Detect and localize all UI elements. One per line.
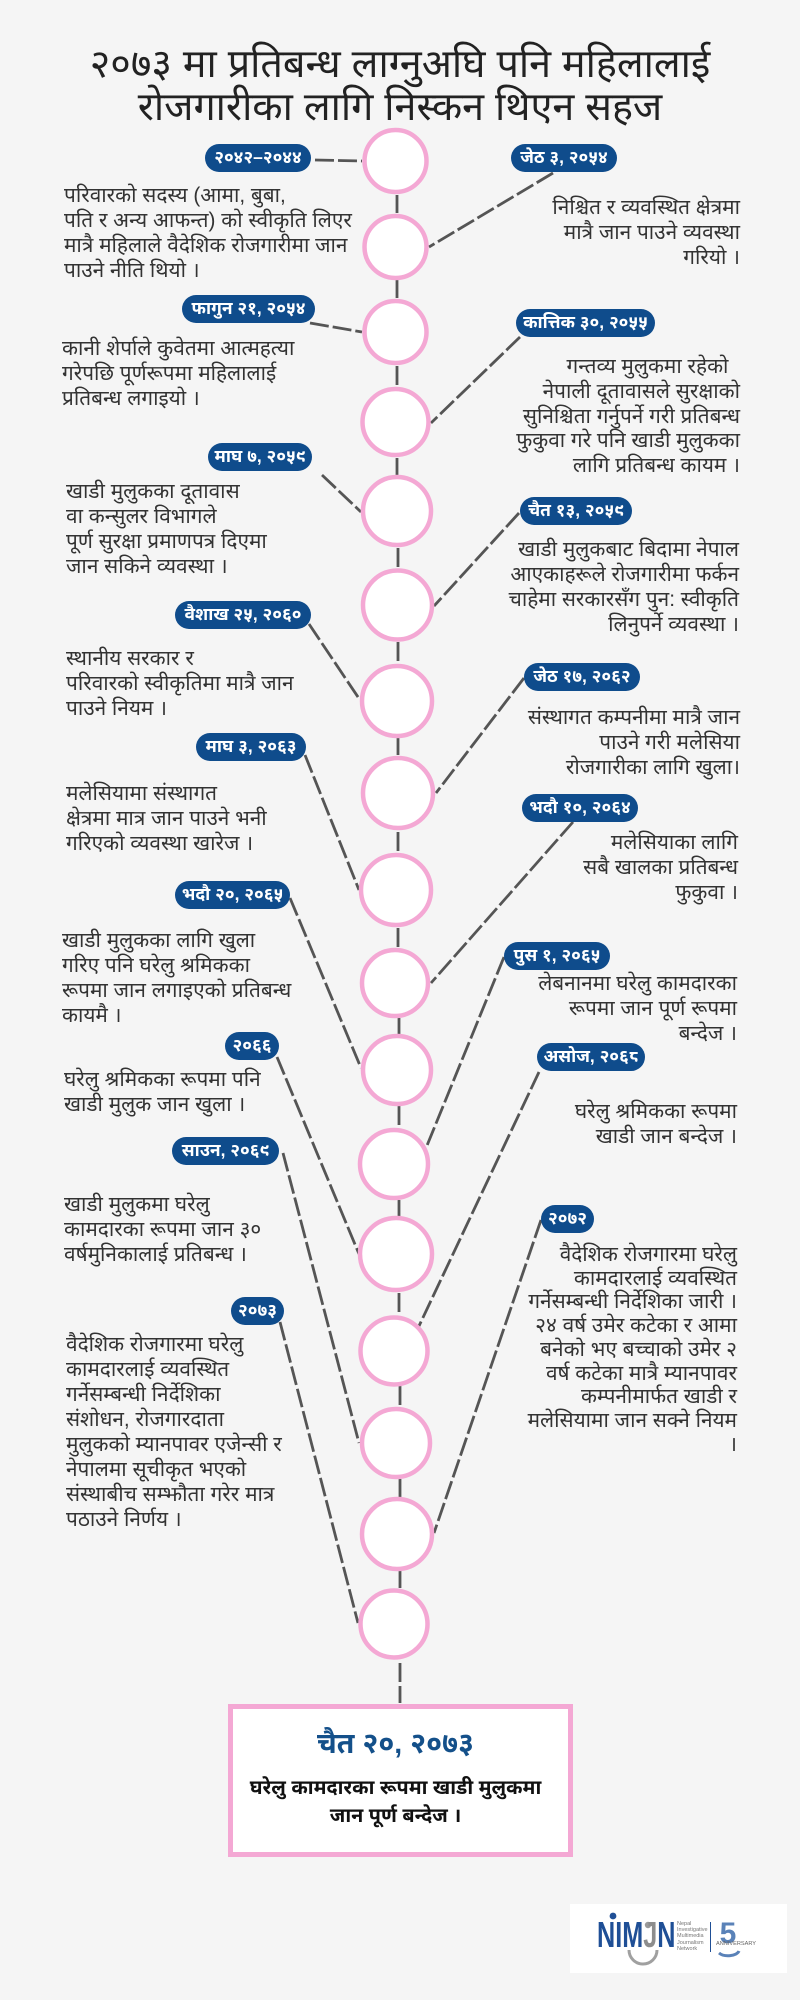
text: under 30 ban: वर्षमुनिकालाई प्रतिबन्ध ।	[64, 1243, 247, 1266]
text: Malaysia all lifted: मलेसियाका लागि	[611, 831, 738, 854]
text: Kani Sherpa: प्रतिबन्ध लगाइयो ।	[62, 387, 200, 410]
date pill: Saun 2069: साउन, २०६९	[182, 1140, 269, 1160]
logo tagline: Network	[677, 1946, 697, 1952]
text: 2072 directive: बनेको भए बच्चाको उमेर २	[540, 1338, 737, 1361]
text: family consent: परिवारको सदस्य (आमा, बुबा,	[64, 184, 286, 207]
text: Kani Sherpa	[62, 336, 295, 410]
text: returnees: चाहेमा सरकारसँग पुन: स्वीकृति	[509, 588, 739, 611]
text: Kani Sherpa: गरेपछि पूर्णरूपमा महिलालाई	[62, 362, 276, 385]
text: Lebanon ban	[538, 972, 738, 1045]
logo tagline	[677, 1921, 708, 1952]
date pill: Baishakh 25 2060	[175, 601, 311, 629]
date pill: 2066: २०६६	[233, 1035, 271, 1055]
text: 2072 directive: गर्नेसम्बन्धी निर्देशिका जारी ।	[528, 1290, 737, 1313]
text: Malaysia scrapped: मलेसियामा संस्थागत	[66, 782, 217, 805]
date pill: Bhadau 20 2065: भदौ २०, २०६५	[182, 884, 283, 904]
date pill: Chait 13 2059: चैत १३, २०५९	[528, 500, 624, 520]
text: Gulf ban domestic	[574, 1100, 738, 1148]
logo: NIMJN	[570, 1904, 787, 1973]
text: organized sector: निश्चित र व्यवस्थित क्षेत्रमा	[552, 196, 740, 219]
date pill: Bhadau 10 2064	[522, 794, 638, 822]
date pill: Jeth 17 2062: जेठ १७, २०६२	[533, 666, 631, 686]
title: २०७३ मा प्रतिबन्ध लाग्नुअघि पनि महिलालाई	[90, 42, 710, 86]
text: embassy certificate: पूर्ण सुरक्षा प्रमाणपत्र दिएमा	[66, 530, 267, 553]
text: Gulf open but domestic ban: रूपमा जान लगाइएको प्रतिबन्ध	[62, 979, 291, 1002]
date pill: Magh 7 2059: माघ ७, २०५९	[215, 446, 305, 466]
logo tagline: Investigative	[677, 1927, 708, 1933]
date pill: 2072	[541, 1205, 594, 1233]
title	[90, 42, 711, 129]
text: 2073 directive amendment: वैदेशिक रोजगारमा घरेलु	[66, 1333, 243, 1356]
text: embassy certificate: वा कन्सुलर विभागले	[66, 505, 217, 528]
logo tagline: Nepal	[677, 1921, 691, 1927]
text: embassy security: नेपाली दूतावासले सुरक्षाको	[543, 380, 740, 403]
final callout box	[228, 1704, 573, 1857]
text: 2073 directive amendment: संस्थाबीच सम्झौता गरेर मात्र	[66, 1483, 274, 1506]
text: organized sector: गरियो ।	[683, 246, 740, 269]
date pill: Bhadau 10 2064: भदौ १०, २०६४	[529, 797, 631, 817]
text: 2073 directive amendment: नेपालमा सूचीकृत भएको	[66, 1458, 246, 1481]
text: local government	[66, 646, 294, 720]
text: 2073 directive amendment: संशोधन, रोजगारदाता	[66, 1408, 224, 1431]
text: domestic workers Gulf open: घरेलु श्रमिकका रूपमा पनि	[64, 1068, 261, 1091]
callout text: घरेलु कामदारका रूपमा खाडी मुलुकमा	[250, 1777, 541, 1799]
text: embassy certificate	[66, 480, 268, 578]
text: embassy security	[516, 354, 740, 477]
text: 2072 directive: कामदारलाई व्यवस्थित	[574, 1267, 737, 1290]
text: under 30 ban	[64, 1192, 261, 1266]
text: Gulf open but domestic ban: खाडी मुलुकका लागि खुला	[62, 929, 255, 952]
text: embassy security: सुनिश्चिता गर्नुपर्ने गरी प्रतिबन्ध	[523, 405, 740, 428]
timeline circles	[360, 130, 433, 1658]
text: 2073 directive amendment	[66, 1332, 282, 1531]
date pill: Bhadau 20 2065	[175, 881, 290, 909]
text: Malaysia scrapped: क्षेत्रमा मात्र जान पाउने भनी	[66, 807, 267, 830]
date pill: Fagun 21 2054	[182, 295, 315, 323]
date pill: Kartik 30 2055: कात्तिक ३०, २०५५	[523, 312, 648, 332]
text: 2072 directive: ।	[729, 1433, 737, 1456]
text: family consent: पति र अन्य आफन्त) को स्वीकृति लिएर	[64, 209, 352, 232]
text: 2072 directive	[528, 1242, 738, 1456]
title: रोजगारीका लागि निस्कन थिएन सहज	[138, 85, 662, 129]
text: embassy certificate: खाडी मुलुकका दूतावास	[66, 480, 240, 503]
text: Gulf ban domestic: खाडी जान बन्देज ।	[596, 1125, 737, 1148]
text: local government: स्थानीय सरकार र	[66, 647, 194, 670]
date pill: Magh 3 2063: माघ ३, २०६३	[206, 736, 296, 756]
logo tagline: Journalism	[677, 1940, 704, 1946]
text: Kani Sherpa: कानी शेर्पाले कुवेतमा आत्महत्या	[62, 337, 294, 360]
text: domestic workers Gulf open: खाडी मुलुक जान खुला ।	[64, 1093, 245, 1116]
text: Lebanon ban: रूपमा जान पूर्ण रूपमा	[569, 997, 737, 1020]
text: Malaysia opened: संस्थागत कम्पनीमा मात्रै जान	[528, 706, 740, 729]
date pill: Kartik 30 2055	[516, 309, 655, 337]
text: Malaysia opened	[528, 705, 740, 780]
logo anniversary 5: 5	[720, 1917, 736, 1950]
date pill: 2073	[231, 1297, 284, 1325]
date pill: Push 1 2065	[504, 942, 610, 970]
text: Gulf open but domestic ban	[62, 928, 292, 1027]
text: 2073 directive amendment: मुलुकको म्यानपावर एजेन्सी र	[66, 1433, 282, 1456]
date pill: Magh 7 2059	[208, 443, 312, 471]
logo tagline: Multimedia	[677, 1933, 704, 1939]
text: Lebanon ban: लेबनानमा घरेलु कामदारका	[538, 972, 737, 995]
text: embassy security: लागि प्रतिबन्ध कायम ।	[573, 454, 740, 477]
date pill: Baishakh 25 2060: वैशाख २५, २०६०	[184, 604, 301, 624]
text: Gulf open but domestic ban: कायमै ।	[62, 1004, 122, 1027]
text: 2072 directive: मलेसियामा जान सक्ने नियम	[528, 1409, 737, 1432]
date pill: 2072: २०७२	[548, 1208, 587, 1228]
date pill: Push 1 2065: पुस १, २०६५	[514, 945, 600, 965]
date pill: 2042-2044	[205, 144, 311, 172]
text: embassy certificate: जान सकिने व्यवस्था ।	[66, 555, 228, 578]
text: Malaysia all lifted: सबै खालका प्रतिबन्ध	[583, 856, 738, 879]
text: embassy security: गन्तव्य मुलुकमा रहेको	[566, 355, 728, 378]
text: 2072 directive: वर्ष कटेका मात्रै म्यानपावर	[546, 1362, 737, 1385]
text: Malaysia opened: रोजगारीका लागि खुला।	[566, 756, 740, 779]
text: 2072 directive: कम्पनीमार्फत खाडी र	[581, 1385, 737, 1408]
text: organized sector	[552, 196, 740, 269]
text: local government: पाउने नियम ।	[66, 697, 167, 720]
text: returnees: खाडी मुलुकबाट बिदामा नेपाल	[518, 538, 739, 561]
text: 2073 directive amendment: कामदारलाई व्यवस्थित	[66, 1358, 229, 1381]
date pill: Fagun 21 2054: फागुन २१, २०५४	[192, 298, 305, 318]
text: organized sector: मात्रै जान पाउने व्यवस्था	[564, 221, 740, 244]
text: returnees: लिनुपर्ने व्यवस्था ।	[608, 613, 739, 636]
text: local government: परिवारको स्वीकृतिमा मात्रै जान	[66, 672, 294, 695]
text: Malaysia opened: पाउने गरी मलेसिया	[599, 731, 740, 754]
date pill: Chait 13 2059	[520, 497, 632, 525]
date pill: Asoj 2068	[537, 1043, 645, 1071]
text: 2073 directive amendment: गर्नेसम्बन्धी निर्देशिका	[66, 1383, 221, 1406]
date pill: 2042-2044: २०४२–२०४४	[214, 147, 302, 167]
date pill: 2066	[225, 1032, 279, 1060]
date pill: Saun 2069	[172, 1137, 279, 1165]
text: 2072 directive: वैदेशिक रोजगारमा घरेलु	[560, 1243, 737, 1266]
callout text	[250, 1776, 542, 1828]
callout date: चैत २०, २०७३	[317, 1728, 474, 1760]
text: returnees: आएकाहरूले रोजगारीमा फर्कन	[510, 563, 739, 586]
text: 2073 directive amendment: पठाउने निर्णय ।	[66, 1508, 182, 1531]
text: family consent: पाउने नीति थियो ।	[64, 259, 200, 282]
text: Gulf open but domestic ban: गरिए पनि घरेलु श्रमिकका	[62, 954, 250, 977]
text: domestic workers Gulf open	[64, 1068, 261, 1116]
text: Malaysia all lifted	[583, 830, 738, 904]
logo graphics	[610, 1912, 740, 1966]
text: family consent: मात्रै महिलाले वैदेशिक रोजगारीमा जान	[64, 234, 347, 257]
logo anniversary label: ANNIVERSARY	[716, 1941, 756, 1947]
text: Malaysia all lifted: फुकुवा ।	[675, 881, 738, 904]
text: returnees	[508, 538, 740, 636]
text: embassy security: फुकुवा गरे पनि खाडी मुलुकका	[516, 429, 740, 452]
date pill: Jeth 3 2054: जेठ ३, २०५४	[520, 147, 608, 167]
callout text: जान पूर्ण बन्देज ।	[330, 1804, 461, 1826]
text: Gulf ban domestic: घरेलु श्रमिकका रूपमा	[575, 1100, 737, 1123]
text: family consent	[64, 184, 352, 282]
connector lines	[277, 160, 573, 1703]
logo wordmark: NIMJN	[597, 1914, 675, 1955]
text: Lebanon ban: बन्देज ।	[679, 1022, 737, 1045]
date pill: Magh 3 2063	[196, 733, 306, 761]
text: Malaysia scrapped: गरिएको व्यवस्था खारेज ।	[66, 832, 253, 855]
date pill: Jeth 17 2062	[524, 663, 640, 691]
text: 2072 directive: २४ वर्ष उमेर कटेका र आमा	[535, 1314, 737, 1337]
text: Malaysia scrapped	[66, 782, 267, 855]
date pill: 2073: २०७३	[238, 1300, 277, 1320]
date pill: Jeth 3 2054	[511, 144, 617, 172]
date pill: Asoj 2068: असोज, २०६८	[543, 1046, 639, 1066]
text: under 30 ban: खाडी मुलुकमा घरेलु	[64, 1193, 210, 1216]
text: under 30 ban: कामदारका रूपमा जान ३०	[64, 1218, 261, 1241]
